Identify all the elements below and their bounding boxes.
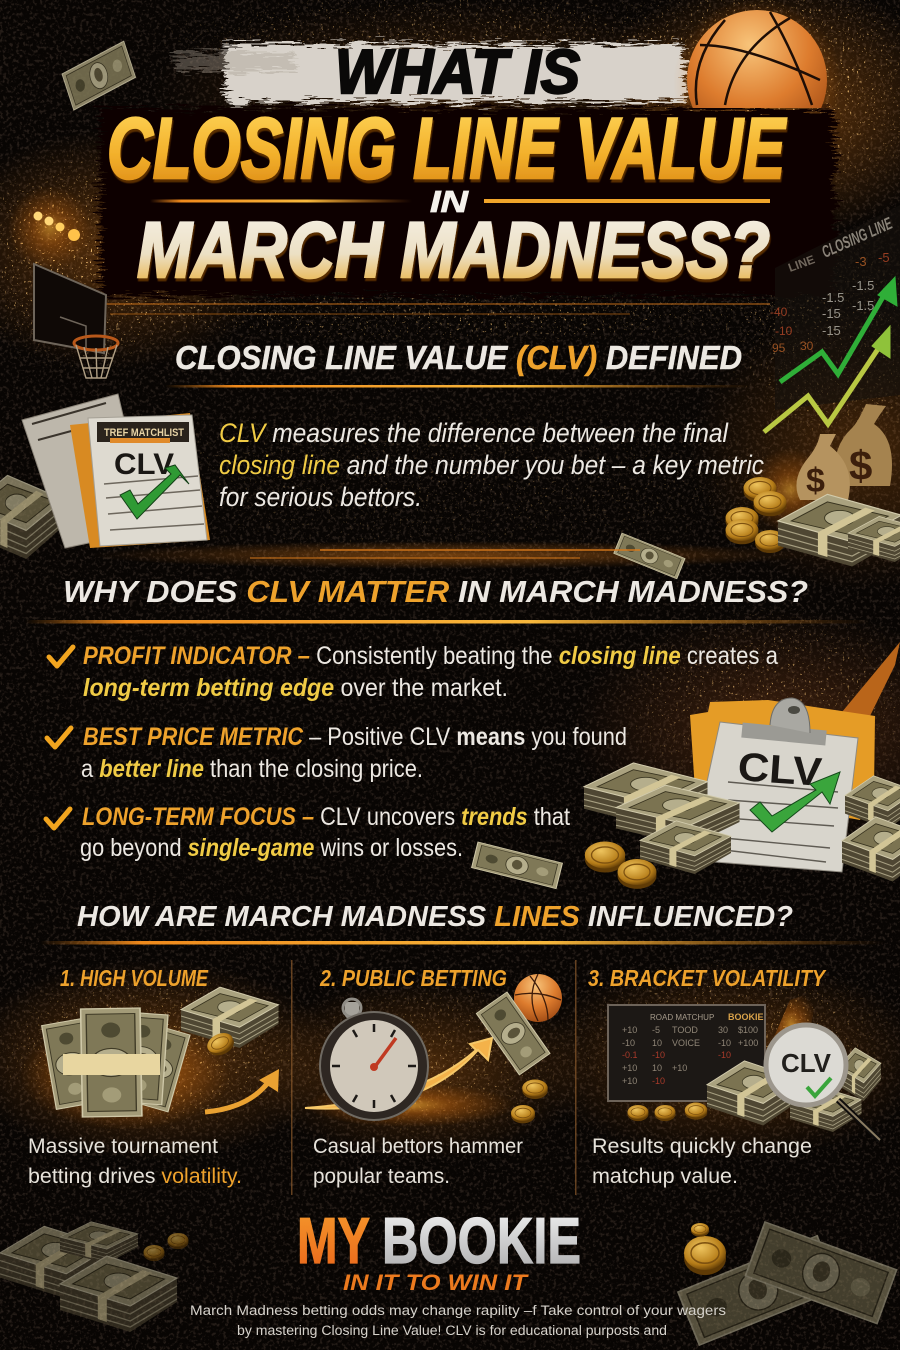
illustration: CLV clipboard with cash xyxy=(472,642,900,889)
icon: odds screen: BOOKIE xyxy=(728,1012,764,1022)
odds board: closing line: 30 xyxy=(800,339,814,353)
illustration: CLV clipboard with cash: CLV xyxy=(736,745,824,795)
title line: what is: WHAT IS xyxy=(335,38,580,107)
bullet: long-term focus: go beyond single-game wins or losses. xyxy=(80,834,463,862)
illustration: money bags, coins and cash: $ xyxy=(806,462,825,500)
icon: cash and coins xyxy=(628,1048,881,1132)
odds board: closing line: -1.5 xyxy=(852,278,874,293)
icon: odds screen: +10 xyxy=(622,1076,637,1086)
icon: odds screen: -10 xyxy=(652,1050,665,1060)
panel text xyxy=(313,1134,523,1188)
section heading: why CLV matters: WHY DOES CLV MATTER IN MARCH MADNESS? xyxy=(63,574,808,609)
logo: MyBookie xyxy=(297,1204,581,1295)
panel text: Massive tournament xyxy=(28,1134,218,1158)
icon: odds screen xyxy=(608,990,818,1101)
icon: basketball hoop xyxy=(34,264,118,378)
title xyxy=(107,38,787,294)
definition text: CLV measures the difference between the final xyxy=(219,418,729,448)
icon: odds screen: -10 xyxy=(718,1050,731,1060)
bullet: profit indicator xyxy=(49,642,778,702)
icon: odds screen: -5 xyxy=(652,1025,660,1035)
odds board: closing line: -1.5 xyxy=(852,298,874,313)
section heading: how lines are influenced xyxy=(40,901,885,944)
icon: odds screen: VOICE xyxy=(672,1038,700,1048)
section heading: why CLV matters xyxy=(25,574,870,624)
definition text: closing line and the number you bet – a key metric xyxy=(219,450,764,480)
odds board: closing line: -15 xyxy=(822,306,841,321)
section heading: how lines are influenced: HOW ARE MARCH MADNESS LINES INFLUENCED? xyxy=(77,901,793,933)
icon: stadium lights xyxy=(8,186,92,270)
odds board: closing line xyxy=(770,205,900,410)
coins bottom right xyxy=(684,1223,726,1275)
icon: odds screen: -10 xyxy=(652,1076,665,1086)
illustration: CLV checklist papers: CLV xyxy=(114,448,174,481)
panel: high volume xyxy=(20,965,279,1188)
odds board: closing line: -1.5 xyxy=(822,290,844,305)
definition text xyxy=(219,418,764,512)
bullet: long-term focus: LONG-TERM FOCUS – CLV uncovers trends that xyxy=(82,803,570,831)
icon: odds screen: +10 xyxy=(672,1063,687,1073)
panel heading: 3. BRACKET VOLATILITY xyxy=(588,965,827,991)
odds board: closing line: 95 xyxy=(772,341,786,355)
arrow: rising curve xyxy=(205,1069,279,1112)
odds board: closing line: -10 xyxy=(775,324,793,338)
panel: bracket volatility xyxy=(588,965,881,1188)
icon: odds screen: ROAD MATCHUP xyxy=(650,1013,714,1022)
illustration: CLV checklist papers: TREF MATCHLIST xyxy=(104,427,184,439)
bullet: best price metric: BEST PRICE METRIC – Positive CLV means you found xyxy=(83,723,627,751)
title line: march madness: MARCH MADNESS? xyxy=(137,205,770,294)
icon: odds screen: $100 xyxy=(738,1025,758,1035)
illustration: cash bottom right xyxy=(678,1222,897,1345)
icon: floating dollar bill xyxy=(62,41,136,110)
icon: odds screen: +10 xyxy=(622,1025,637,1035)
odds board: closing line: -3 xyxy=(855,254,867,269)
bullet: best price metric xyxy=(47,723,627,783)
icon: odds screen: -10 xyxy=(718,1038,731,1048)
bullet: profit indicator: PROFIT INDICATOR – Consistently beating the closing line creates a xyxy=(83,642,778,670)
tagline: IN IT TO WIN IT xyxy=(343,1270,529,1295)
ember streak xyxy=(250,549,640,559)
icon: flying bill xyxy=(476,992,550,1075)
icon: odds screen: 10 xyxy=(652,1038,662,1048)
icon: rising green arrows xyxy=(764,277,897,432)
illustration: CLV checklist papers xyxy=(0,394,210,559)
illustration: cash bottom left xyxy=(0,1222,188,1332)
bullet list xyxy=(46,642,778,862)
section heading: CLV defined: CLOSING LINE VALUE (CLV) DEFINED xyxy=(175,339,742,376)
title backdrop xyxy=(80,44,835,315)
column dividers xyxy=(291,960,576,1195)
panel heading: 2. PUBLIC BETTING xyxy=(319,965,507,991)
odds board: closing line: -15 xyxy=(822,323,841,338)
panel text: Casual bettors hammer xyxy=(313,1134,523,1158)
logo: MyBookie: BOOKIE xyxy=(382,1204,581,1277)
panel heading: 1. HIGH VOLUME xyxy=(60,965,209,991)
icon: fanned cash xyxy=(20,987,278,1130)
icon: small basketball xyxy=(514,974,562,1022)
panel text: matchup value. xyxy=(592,1164,738,1188)
icon: odds screen: +100 xyxy=(738,1038,758,1048)
icon: flaming arrow xyxy=(305,1038,515,1127)
odds board: closing line: -5 xyxy=(878,250,890,265)
bullet: best price metric: a better line than the closing price. xyxy=(81,755,423,783)
icon: CLV magnifier xyxy=(766,1025,880,1140)
icon: odds screen: TOOD xyxy=(672,1025,698,1035)
definition text: for serious bettors. xyxy=(219,482,422,512)
icon: odds screen: -10 xyxy=(622,1038,635,1048)
panel: public betting xyxy=(305,965,562,1188)
panel text xyxy=(28,1134,242,1188)
odds board: closing line: -40 xyxy=(770,305,788,319)
logo: MyBookie: MY xyxy=(297,1204,370,1277)
panel text: Results quickly change xyxy=(592,1134,812,1158)
footer disclaimer: March Madness betting odds may change rapility –f Take control of your wagers xyxy=(190,1303,726,1318)
title line: in: IN xyxy=(430,184,469,219)
odds board: closing line: LINE xyxy=(786,252,817,275)
icon: basketball xyxy=(678,2,836,108)
panel text xyxy=(592,1134,812,1188)
panel text: popular teams. xyxy=(313,1164,450,1188)
footer disclaimer xyxy=(190,1303,726,1338)
icon: odds screen: -0.1 xyxy=(622,1050,638,1060)
illustration: money bags, coins and cash: $ xyxy=(849,442,872,489)
footer disclaimer: by mastering Closing Line Value! CLV is for educational purposts and xyxy=(237,1323,667,1338)
icon: stopwatch xyxy=(320,999,428,1120)
icon: odds screen: 30 xyxy=(718,1025,728,1035)
icon: CLV magnifier: CLV xyxy=(781,1048,832,1078)
bullet: long-term focus xyxy=(46,803,570,862)
coins xyxy=(511,1080,548,1123)
bullet: profit indicator: long-term betting edge over the market. xyxy=(83,674,508,702)
illustration: money bags, coins and cash xyxy=(614,404,900,579)
icon: odds screen: 10 xyxy=(652,1063,662,1073)
icon: odds screen: +10 xyxy=(622,1063,637,1073)
panel text: betting drives volatility. xyxy=(28,1164,242,1188)
